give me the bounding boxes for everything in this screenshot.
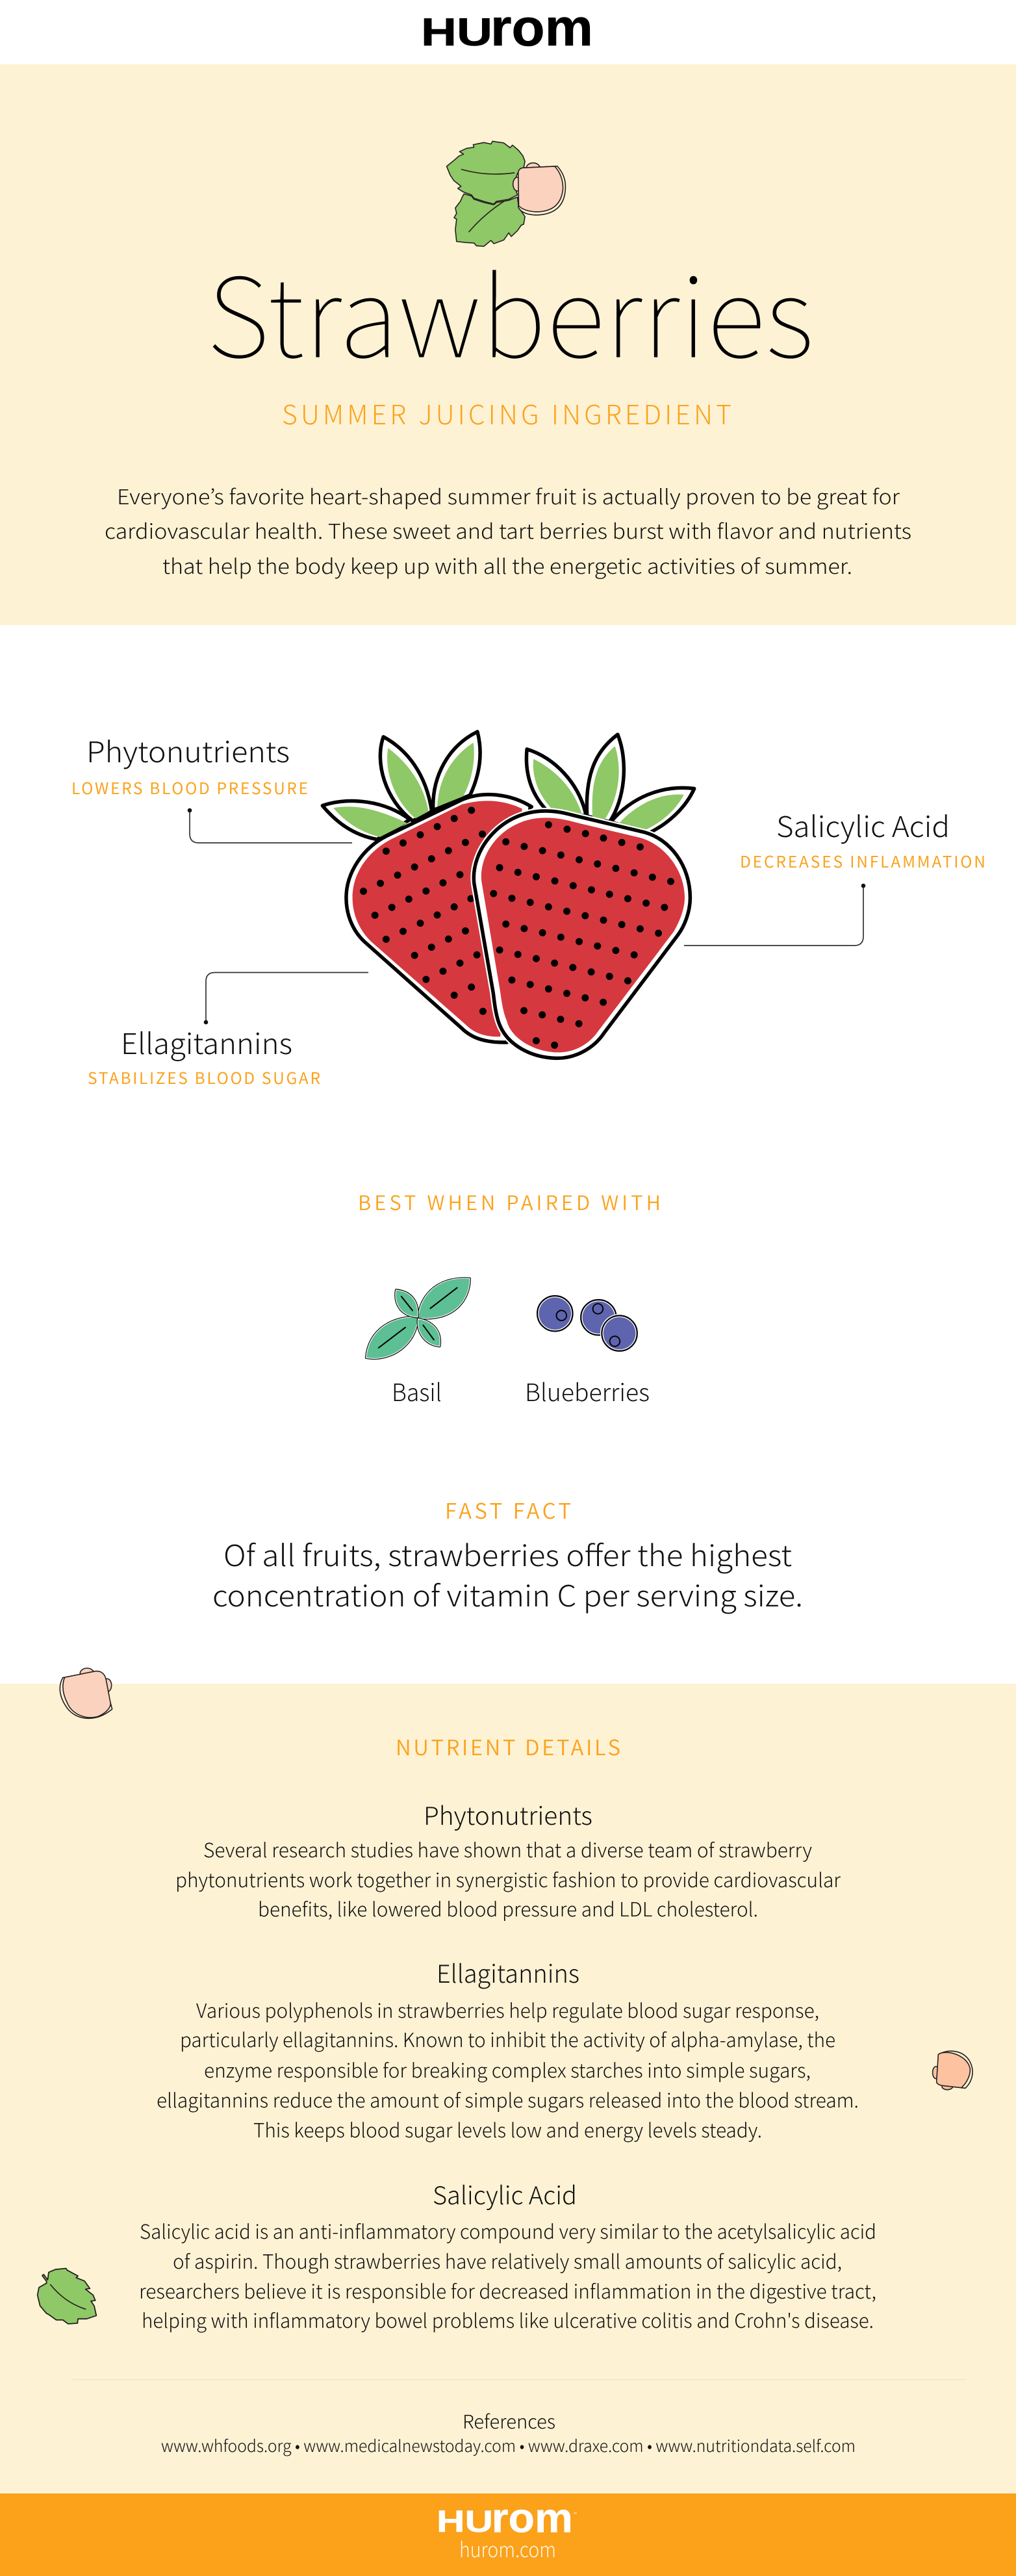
block: salicylic acid: Salicylic Acid <box>433 2176 577 2211</box>
heading: paired: BEST WHEN PAIRED WITH <box>358 1187 661 1216</box>
footer logo <box>437 2494 573 2541</box>
left strawberry <box>322 732 531 1042</box>
block: ellagitannins: Various polyphenols in strawberries help regulate blood sugar response, <box>196 1995 819 2024</box>
block: ellagitannins: Ellagitannins <box>437 1954 579 1990</box>
references: www.whfoods.org • www.medicalnewstoday.com • www.draxe.com • www.nutritiondata.self.com <box>161 2434 856 2457</box>
panel: nutrient details <box>0 1684 1016 2493</box>
callout: salicylic acid: DECREASES INFLAMMATION <box>740 850 985 873</box>
callout: phytonutrients <box>71 729 352 843</box>
intro text: cardiovascular health. These sweet and tart berries burst with flavor and nutrients <box>105 515 911 545</box>
block: ellagitannins <box>157 1954 859 2143</box>
label: blueberries: Blueberries <box>525 1373 650 1408</box>
intro text: Everyone’s favorite heart-shaped summer fruit is actually proven to be great for <box>117 481 900 511</box>
intro text: that help the body keep up with all the energetic activities of summer. <box>162 550 852 580</box>
block: salicylic acid: of aspirin. Though strawberries have relatively small amounts of salicylic acid, <box>173 2246 842 2274</box>
block: ellagitannins: This keeps blood sugar levels low and energy levels steady. <box>253 2115 762 2143</box>
references <box>161 2407 856 2457</box>
icon: blueberries <box>537 1296 639 1353</box>
panel: hero <box>0 64 1016 625</box>
block: salicylic acid: Salicylic acid is an anti-inflammatory compound very similar to the acetylsalicylic acid <box>140 2216 876 2245</box>
fast fact text <box>212 1532 803 1615</box>
label: basil: Basil <box>392 1373 442 1408</box>
strawberries illustration <box>322 732 694 1058</box>
callout: ellagitannins <box>88 972 368 1089</box>
icon: peach right <box>933 2051 972 2090</box>
block: phytonutrients: phytonutrients work together in synergistic fashion to provide cardiovascular <box>175 1864 841 1893</box>
callout: phytonutrients: Phytonutrients <box>86 729 290 771</box>
right strawberry <box>474 734 694 1058</box>
heading: fast fact: FAST FACT <box>445 1494 571 1525</box>
panel: footer <box>0 2493 1016 2576</box>
fast fact text: Of all fruits, strawberries offer the highest <box>223 1532 792 1575</box>
fast fact text: concentration of vitamin C per serving size. <box>212 1573 803 1615</box>
title: Strawberries <box>207 229 814 389</box>
callout: ellagitannins: Ellagitannins <box>121 1021 292 1063</box>
callout: salicylic acid: Salicylic Acid <box>776 804 950 845</box>
block: salicylic acid: researchers believe it is responsible for decreased inflammation in the digestive tract, <box>139 2276 876 2304</box>
block: phytonutrients: Phytonutrients <box>424 1796 592 1832</box>
block: salicylic acid: helping with inflammatory bowel problems like ulcerative colitis and Crohn's disease. <box>142 2305 874 2334</box>
block: phytonutrients: Several research studies have shown that a diverse team of strawberry <box>203 1835 812 1863</box>
icon: leaves and peach <box>447 141 565 246</box>
references: References <box>463 2407 555 2434</box>
intro text <box>105 481 911 580</box>
block: salicylic acid <box>139 2176 876 2334</box>
icon: leaf left <box>38 2269 96 2324</box>
block: ellagitannins: particularly ellagitannins. Known to inhibit the activity of alpha-amylase, the <box>180 2024 835 2053</box>
header logo: rom <box>490 0 593 57</box>
icon: peach top left <box>60 1668 112 1718</box>
heading: nutrient details: NUTRIENT DETAILS <box>396 1731 620 1762</box>
block: ellagitannins: enzyme responsible for breaking complex starches into simple sugars, <box>204 2055 811 2083</box>
header logo: HU <box>421 10 492 54</box>
block: phytonutrients <box>175 1796 841 1922</box>
icon: basil <box>366 1278 470 1358</box>
callout: phytonutrients: LOWERS BLOOD PRESSURE <box>71 777 308 799</box>
subtitle: SUMMER JUICING INGREDIENT <box>282 393 731 432</box>
block: ellagitannins: ellagitannins reduce the amount of simple sugars released into the blood stream. <box>157 2085 859 2113</box>
footer url: hurom.com <box>459 2534 556 2564</box>
footer logo: rom <box>492 2494 573 2541</box>
callout: salicylic acid <box>684 804 985 946</box>
header logo <box>421 0 593 57</box>
callout: ellagitannins: STABILIZES BLOOD SUGAR <box>88 1066 320 1089</box>
section: fast fact <box>212 1494 803 1615</box>
block: phytonutrients: benefits, like lowered blood pressure and LDL cholesterol. <box>258 1894 758 1922</box>
footer logo: HU <box>437 2505 493 2539</box>
section: best when paired with <box>358 1187 661 1408</box>
